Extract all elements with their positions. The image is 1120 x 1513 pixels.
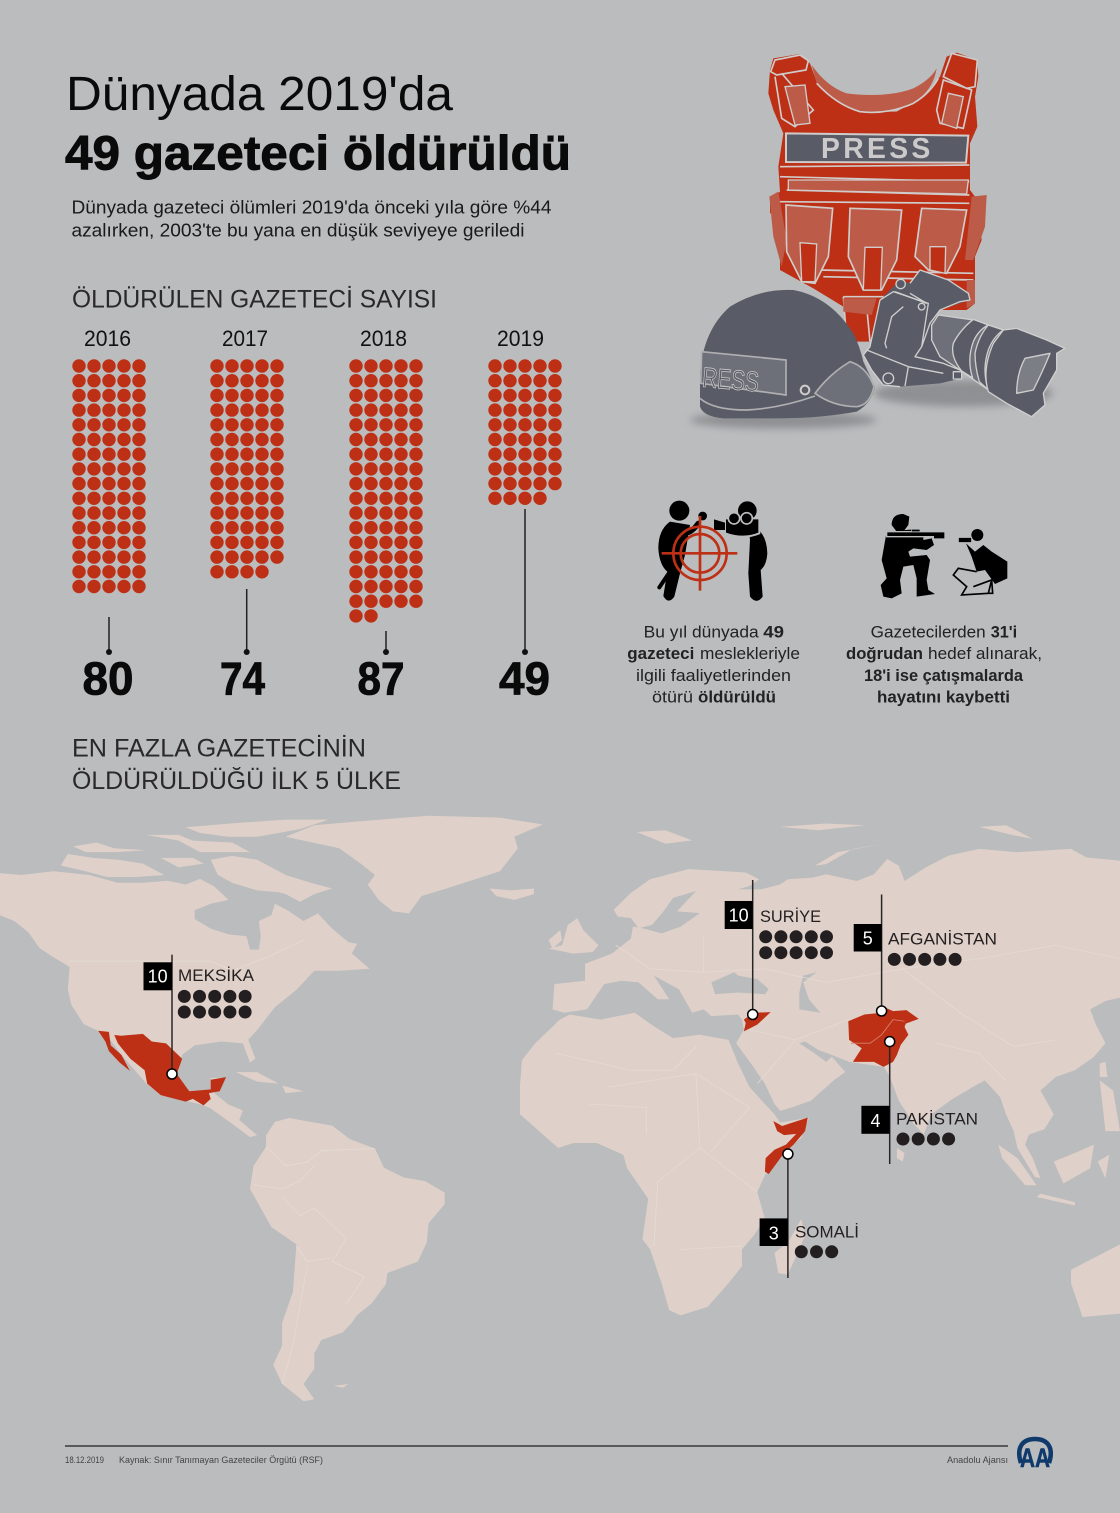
totals: 74 bbox=[220, 652, 265, 704]
heading: killed journalists count: ÖLDÜRÜLEN GAZETECİ SAYISI bbox=[72, 284, 437, 313]
dot chart: 2018 (87) bbox=[356, 366, 416, 616]
heading: top five countries: EN FAZLA GAZETECİNİN bbox=[72, 734, 366, 763]
subtitle bbox=[72, 196, 552, 241]
title: Dünyada 2019'da bbox=[66, 68, 453, 121]
footer: agency name: Anadolu Ajansı bbox=[947, 1455, 1008, 1465]
text: left icon caption: öldürüldü bbox=[698, 688, 776, 706]
title bbox=[65, 68, 571, 180]
title: 49 gazeteci öldürüldü bbox=[65, 128, 571, 180]
callout: Afghanistan 5: AFGANİSTAN bbox=[888, 930, 997, 948]
logo: AA bbox=[1019, 1439, 1051, 1473]
dot chart: 2016 (80) bbox=[79, 366, 139, 587]
illustration: press vest, helmet and camera bbox=[690, 53, 1065, 429]
footer: date and source: Kaynak: Sınır Tanımayan Gazeteciler Örgütü (RSF) bbox=[119, 1455, 323, 1465]
year labels: 2019 bbox=[497, 326, 544, 351]
text: right icon caption: 31'i bbox=[991, 622, 1017, 642]
totals: 49 bbox=[499, 652, 550, 704]
camera bbox=[863, 270, 1065, 417]
text: left icon caption: ilgili faaliyetlerinden bbox=[636, 666, 791, 685]
dot chart: 2017 (74) bbox=[217, 366, 277, 572]
callout: Pakistan 4: PAKİSTAN bbox=[896, 1110, 978, 1128]
dot chart: 2019 (49) bbox=[495, 366, 555, 499]
callout: Somalia 3 bbox=[760, 1149, 859, 1278]
year labels: 2018 bbox=[360, 326, 407, 351]
text: left icon caption: 49 bbox=[763, 622, 784, 642]
callout: Mexico 10 bbox=[144, 955, 255, 1079]
vest: PRESS bbox=[821, 133, 930, 165]
text: right icon caption bbox=[846, 622, 1042, 706]
vest bbox=[768, 53, 987, 342]
text: left icon caption: Bu yıl dünyada bbox=[644, 622, 759, 642]
callout: Somalia 3: 3 bbox=[769, 1224, 779, 1244]
year labels bbox=[84, 326, 544, 351]
text: left icon caption: gazeteci bbox=[627, 644, 694, 663]
text: right icon caption: Gazetecilerden bbox=[871, 622, 986, 642]
totals bbox=[82, 652, 550, 704]
press label bbox=[786, 133, 968, 163]
year labels: 2017 bbox=[222, 326, 268, 351]
icon: soldier and photographer bbox=[881, 514, 1007, 598]
callout: Syria 10 bbox=[725, 880, 833, 1020]
country: Afghanistan and Pakistan bbox=[848, 1007, 919, 1067]
totals: 80 bbox=[82, 652, 134, 704]
logo: AA: AA bbox=[1020, 1443, 1050, 1473]
footer: date and source: 18.12.2019 bbox=[65, 1455, 104, 1465]
callout: Somalia 3: SOMALİ bbox=[795, 1222, 859, 1242]
callout: Mexico 10: MEKSİKA bbox=[178, 966, 255, 985]
callout: Syria 10: SURİYE bbox=[760, 907, 821, 926]
subtitle: azalırken, 2003'te bu yana en düşük seviyeye geriledi bbox=[72, 220, 524, 241]
ground shadow bbox=[690, 380, 1053, 429]
country: Somalia bbox=[765, 1118, 808, 1174]
heading: top five countries: ÖLDÜRÜLDÜĞÜ İLK 5 ÜLKE bbox=[72, 766, 401, 795]
callout: Pakistan 4: 4 bbox=[870, 1111, 881, 1131]
callout: Pakistan 4 bbox=[861, 1037, 978, 1164]
text: right icon caption: 18'i ise çatışmalarda bbox=[864, 666, 1024, 685]
text: left icon caption: meslekleriyle bbox=[700, 644, 800, 663]
footer rule bbox=[65, 1445, 1008, 1447]
year labels: 2016 bbox=[84, 326, 131, 351]
helmet bbox=[700, 290, 875, 418]
world map bbox=[0, 816, 1120, 1401]
text: right icon caption: hedef alınarak, bbox=[928, 644, 1042, 663]
icon: journalists in crosshair bbox=[658, 501, 767, 601]
text: left icon caption bbox=[627, 622, 800, 706]
callout: Mexico 10: 10 bbox=[148, 966, 168, 986]
text: right icon caption: hayatını kaybetti bbox=[877, 688, 1010, 706]
callout: Syria 10: 10 bbox=[729, 906, 749, 926]
subtitle: Dünyada gazeteci ölümleri 2019'da önceki yıla göre %44 bbox=[72, 196, 552, 217]
country: Syria bbox=[744, 1012, 771, 1031]
heading: top five countries bbox=[72, 734, 401, 795]
country: Mexico bbox=[98, 1031, 226, 1105]
totals: 87 bbox=[358, 652, 404, 704]
helmet: RESS bbox=[701, 362, 760, 398]
text: left icon caption: ötürü bbox=[652, 688, 693, 706]
callout: Afghanistan 5: 5 bbox=[863, 928, 873, 948]
text: right icon caption: doğrudan bbox=[846, 644, 923, 663]
stems to totals bbox=[106, 509, 528, 655]
callout: Afghanistan 5 bbox=[854, 894, 997, 1016]
